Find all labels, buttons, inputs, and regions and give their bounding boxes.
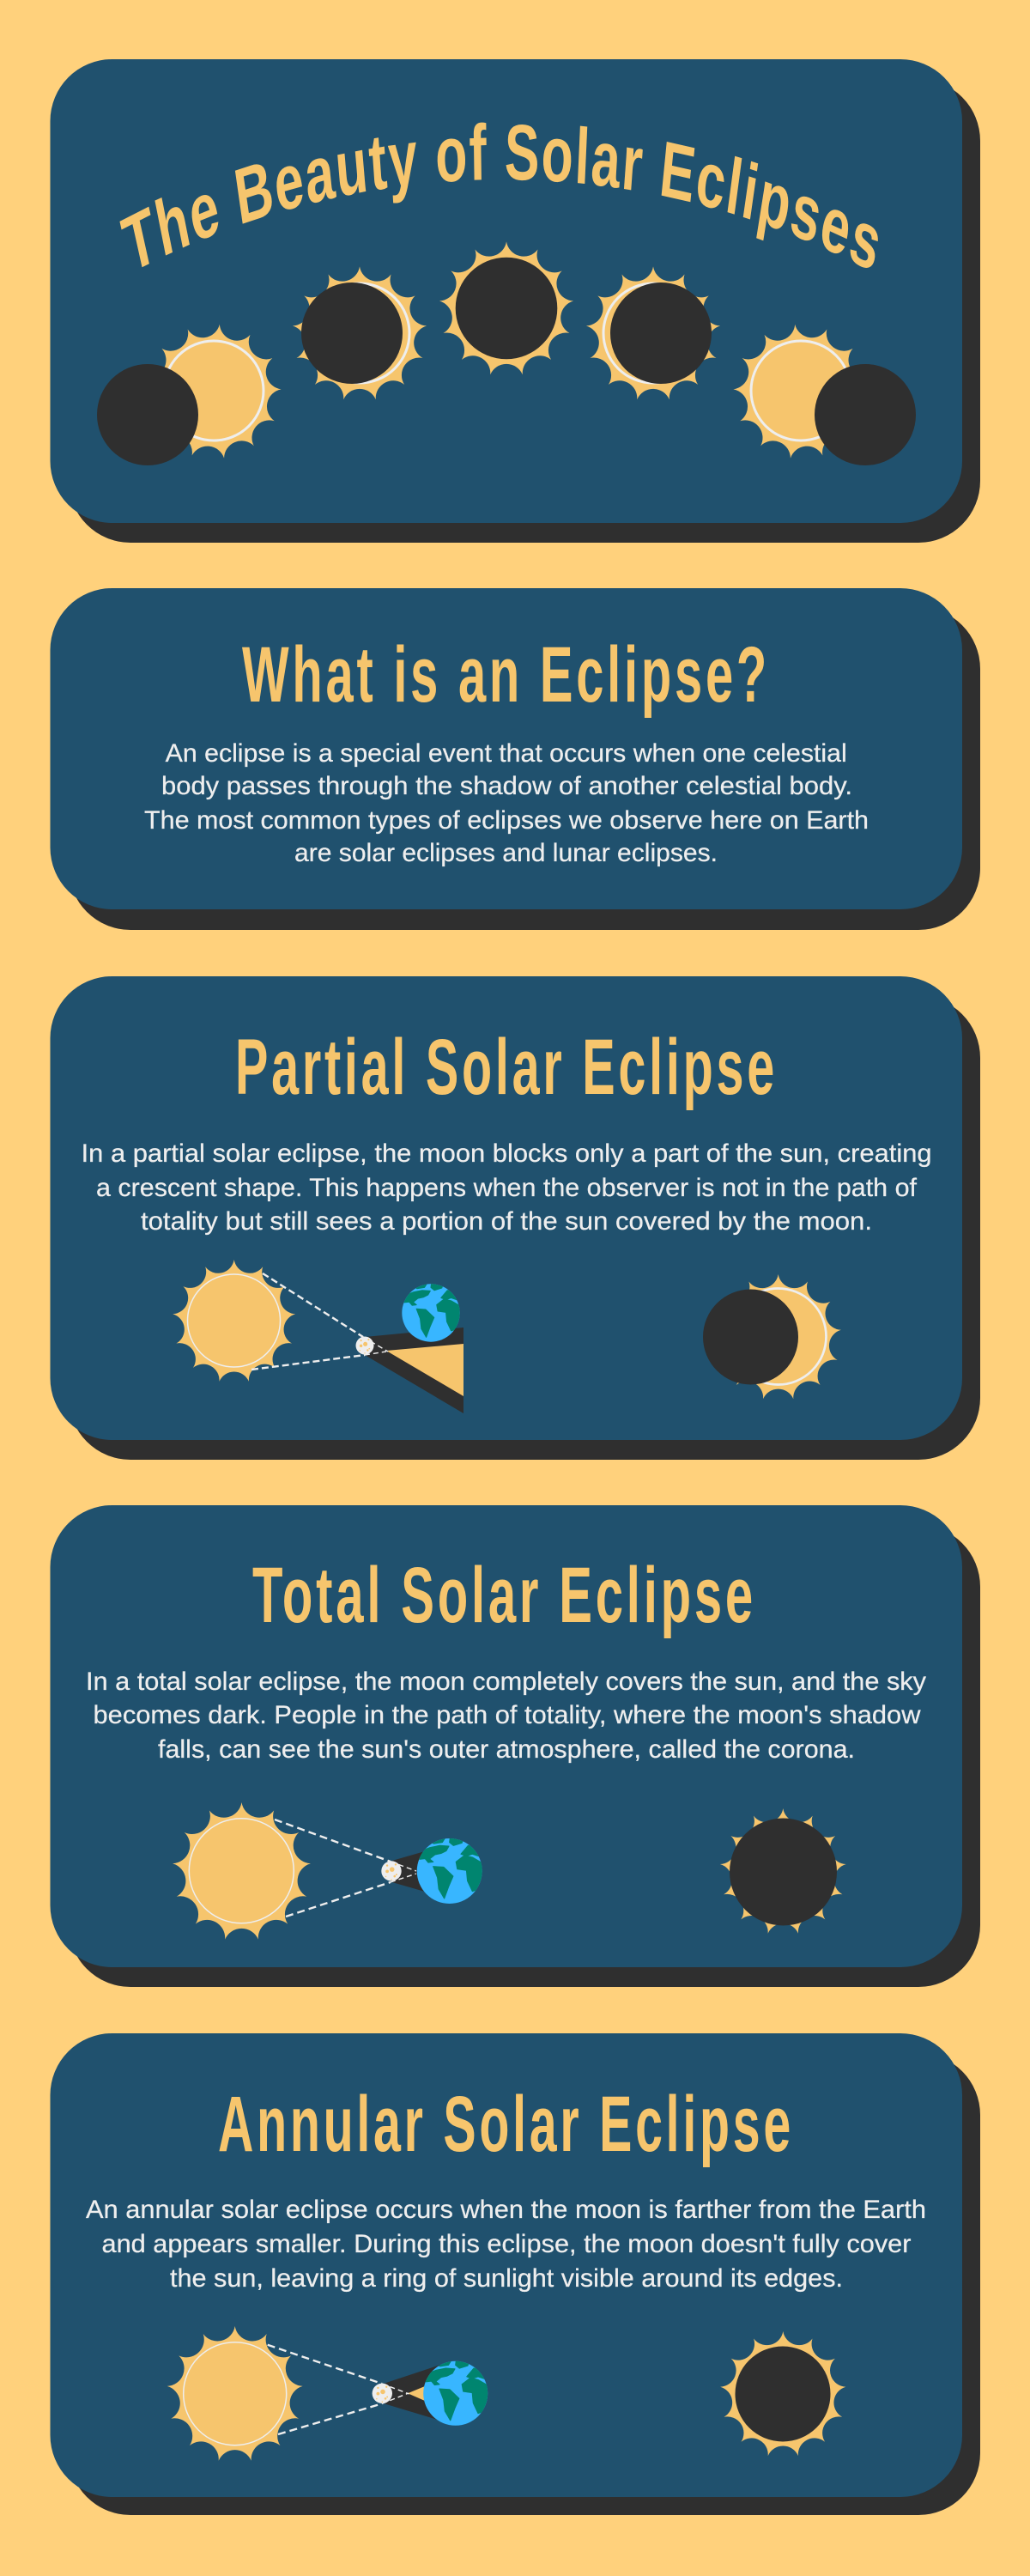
phase: nearly total, left [293, 266, 427, 399]
partial sunlight region [386, 1344, 464, 1396]
sight lines [268, 2345, 409, 2434]
description: and appears smaller. During this eclipse, the moon doesn't fully cover [101, 2230, 912, 2258]
description: falls, can see the sun's outer atmosphere, called the corona. [158, 1735, 855, 1764]
eclipse sequence [97, 241, 916, 465]
description: The most common types of eclipses we observe here on Earth [144, 806, 869, 835]
panel: partial solar eclipse [50, 976, 980, 1460]
diagram: total eclipse geometry [173, 1802, 485, 1940]
icon: annular eclipse [720, 2331, 845, 2456]
diagram: annular eclipse geometry [167, 2326, 490, 2461]
phase: first contact [97, 319, 287, 465]
card [50, 976, 962, 1440]
hero card shadow [69, 79, 980, 543]
panel: total solar eclipse [50, 1505, 980, 1987]
card shadow [69, 1525, 980, 1987]
sun [167, 2326, 303, 2461]
card shadow [69, 996, 980, 1460]
description: In a total solar eclipse, the moon completely covers the sun, and the sky [86, 1668, 926, 1696]
sight lines [251, 1273, 388, 1370]
moon [355, 1336, 374, 1355]
description: a crescent shape. This happens when the observer is not in the path of [96, 1174, 918, 1202]
sun [173, 1802, 311, 1940]
earth [401, 1283, 462, 1342]
description: are solar eclipses and lunar eclipses. [294, 839, 718, 867]
description [144, 739, 869, 867]
antumbra sunlight region [408, 2386, 425, 2401]
moon shadow cone [384, 2365, 440, 2421]
heading: Total Solar Eclipse [252, 1552, 756, 1639]
moon [381, 1861, 402, 1881]
phase: totality [439, 241, 573, 374]
earth [415, 1837, 485, 1904]
description: becomes dark. People in the path of totality, where the moon's shadow [93, 1701, 921, 1729]
description: body passes through the shadow of another celestial body. [161, 772, 852, 800]
icon: total eclipse [720, 1808, 846, 1934]
card shadow [69, 2053, 980, 2515]
sun [173, 1260, 295, 1382]
description: An eclipse is a special event that occurs when one celestial [166, 739, 847, 768]
card shadow [69, 607, 980, 930]
phase: last contact [728, 319, 916, 465]
card [50, 588, 962, 909]
phase: nearly total, right [586, 266, 720, 399]
panel: what is an eclipse [50, 588, 980, 930]
description: the sun, leaving a ring of sunlight visible around its edges. [170, 2264, 843, 2293]
description [86, 1668, 926, 1764]
sight lines [275, 1820, 416, 1917]
icon: partial eclipse [703, 1274, 841, 1399]
moon shadow wedge [365, 1327, 464, 1413]
panel: annular solar eclipse [50, 2033, 980, 2515]
hero card [50, 59, 962, 523]
card [50, 1505, 962, 1967]
moon shadow cone [392, 1851, 425, 1892]
description: totality but still sees a portion of the sun covered by the moon. [141, 1207, 872, 1236]
earth [422, 2360, 490, 2426]
card [50, 2033, 962, 2497]
description [82, 1139, 932, 1236]
moon [373, 2384, 392, 2403]
description: In a partial solar eclipse, the moon blocks only a part of the sun, creating [82, 1139, 932, 1168]
description [86, 2196, 926, 2293]
description: An annular solar eclipse occurs when the moon is farther from the Earth [86, 2196, 926, 2224]
panel: hero [50, 59, 980, 543]
title: The Beauty of Solar Eclipses [120, 122, 878, 268]
diagram: partial eclipse geometry [173, 1260, 464, 1413]
